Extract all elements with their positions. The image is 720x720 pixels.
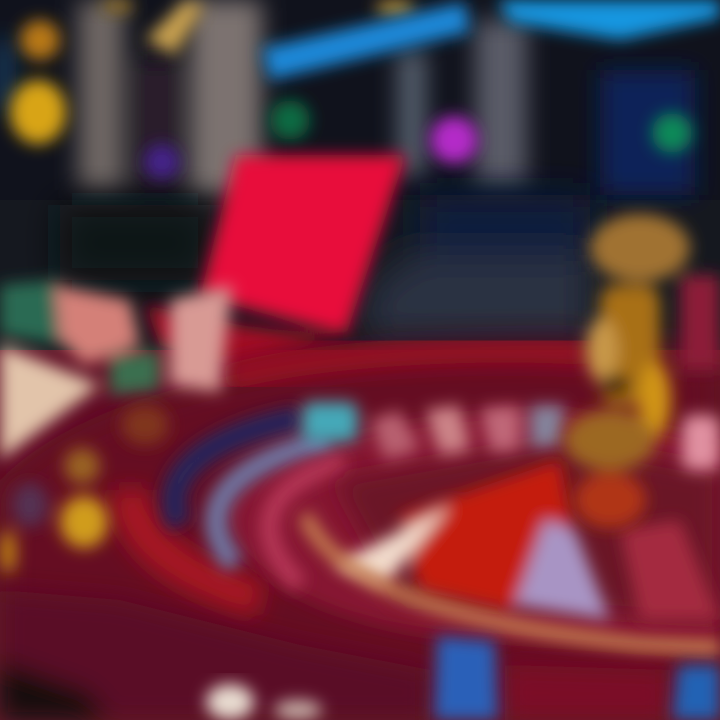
lights: hanging lanterns and coloured lamps — [10, 0, 692, 180]
dark band and slate table behind panel — [60, 195, 590, 340]
left table: cards and felt — [0, 280, 232, 460]
blue neon bands — [262, 0, 720, 80]
wheel: stripe ring — [302, 402, 720, 470]
columns: grey pillars — [0, 0, 695, 195]
white chips at bottom — [206, 684, 322, 720]
wheel: gold rim line — [305, 515, 720, 648]
chips: gold stacks on the left — [0, 405, 169, 574]
roulette turret: gold spindle — [564, 214, 720, 528]
red panel — [145, 155, 406, 365]
wheel: coloured rings — [174, 410, 720, 655]
wheel rim — [0, 345, 720, 720]
wheel: centre segments — [335, 460, 720, 620]
foreground: dark maroon table edge — [0, 590, 670, 720]
blue stripes on table edge — [434, 636, 720, 720]
